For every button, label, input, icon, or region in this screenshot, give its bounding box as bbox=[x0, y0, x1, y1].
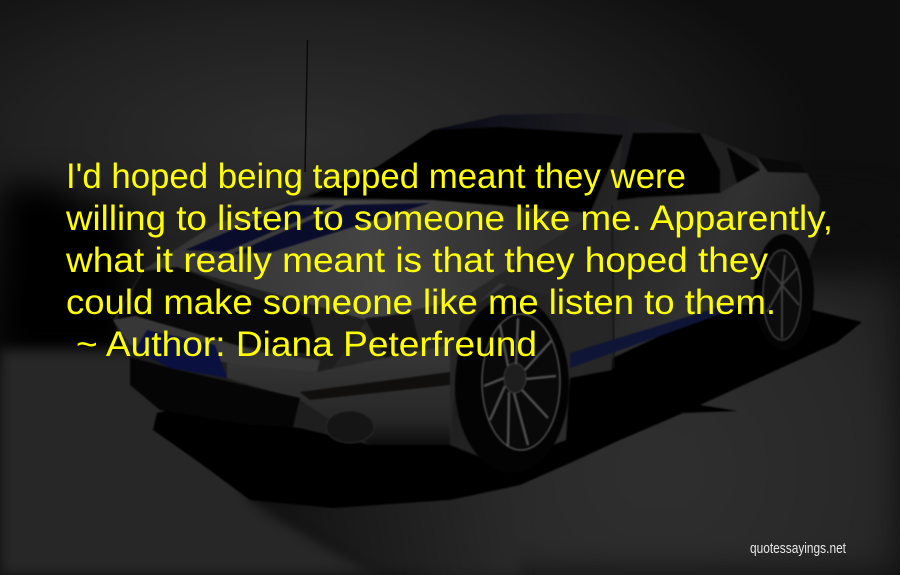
side sill stripe bbox=[570, 302, 738, 368]
fog lamp bbox=[326, 411, 374, 443]
quote text: could make someone like me listen to them. bbox=[66, 283, 776, 322]
hood bbox=[143, 200, 590, 320]
watermark: quotessayings.net bbox=[750, 540, 847, 557]
front wheel bbox=[482, 314, 560, 450]
roof with blue stripe bbox=[433, 113, 760, 200]
car shadow bbox=[153, 300, 862, 508]
grille bbox=[117, 267, 320, 355]
quote text: willing to listen to someone like me. Apparently, bbox=[65, 199, 833, 238]
rear wheel bbox=[763, 250, 801, 340]
air intake bbox=[130, 357, 300, 427]
rear quarter window bbox=[727, 147, 760, 183]
door line bbox=[612, 205, 614, 368]
illustration: sports car bbox=[113, 113, 862, 508]
quote text: I'd hoped being tapped meant they were bbox=[66, 157, 686, 196]
racing stripes on hood bbox=[185, 203, 430, 254]
headlight bbox=[365, 314, 420, 358]
car body bbox=[113, 113, 820, 465]
front bumper bbox=[227, 345, 450, 445]
rear wheel arch bbox=[754, 234, 814, 350]
front wheel arch bbox=[455, 297, 569, 473]
blue bumper stripe bbox=[135, 330, 227, 378]
dark band bbox=[300, 372, 450, 400]
front fender bbox=[317, 200, 617, 445]
light nose band bbox=[113, 316, 320, 372]
spoiler bbox=[757, 157, 807, 173]
icon: car antenna bbox=[305, 40, 308, 172]
quote text bbox=[65, 157, 833, 322]
side window bbox=[617, 133, 720, 200]
author attribution: ~ Author: Diana Peterfreund bbox=[76, 325, 537, 364]
windshield bbox=[307, 127, 623, 213]
quote text: what it really meant is that they hoped they bbox=[65, 241, 769, 280]
